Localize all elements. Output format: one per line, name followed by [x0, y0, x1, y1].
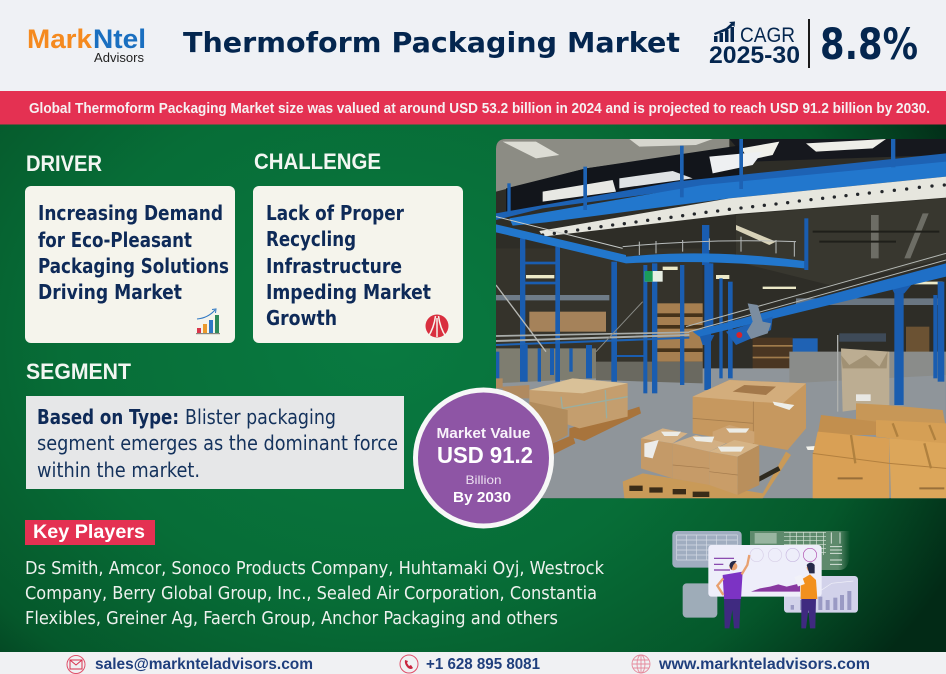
- logo: [27, 24, 146, 65]
- challenge text: Lack of Proper: [266, 201, 404, 225]
- key players list: Company, Berry Global Group, Inc., Sealed Air Corporation, Constantia: [25, 583, 597, 604]
- illustration: analysts at dashboard: [672, 531, 858, 628]
- key players list: Flexibles, Greiner Ag, Faerch Group, Anchor Packaging and others: [25, 608, 558, 629]
- panel: segment: segment emerges as the dominant force: [37, 431, 398, 455]
- footer: website: www.marknteladvisors.com: [658, 656, 870, 673]
- logo: Ntel: [93, 24, 146, 54]
- key players list: [25, 558, 605, 629]
- driver text: [38, 201, 229, 304]
- panel: segment: Blister packaging: [185, 405, 336, 429]
- person right: [794, 563, 817, 628]
- panel: driver: [25, 186, 235, 343]
- heading: driver: DRIVER: [26, 151, 102, 176]
- circle: market value: USD 91.2: [437, 442, 533, 468]
- heading: segment: SEGMENT: [26, 359, 132, 384]
- key players list: Ds Smith, Amcor, Sonoco Products Company, Huhtamaki Oyj, Westrock: [25, 558, 605, 579]
- CAGR block: [709, 19, 918, 70]
- logo: Mark: [27, 24, 93, 54]
- key players label: Key Players: [33, 522, 145, 543]
- circle: market value: Market Value: [436, 426, 530, 442]
- icon: growth bars: [714, 22, 735, 42]
- driver text: for Eco-Pleasant: [38, 228, 192, 252]
- challenge text: Growth: [266, 306, 337, 330]
- circle: market value: [413, 388, 554, 528]
- logo: Advisors: [94, 50, 144, 65]
- summary banner: [0, 91, 946, 124]
- footer: phone: +1 628 895 8081: [426, 656, 540, 673]
- key players label: [25, 520, 155, 545]
- driver text: Packaging Solutions: [38, 254, 229, 278]
- panel: challenge: [253, 186, 463, 343]
- challenge text: Recycling: [266, 227, 356, 251]
- panel: segment: within the market.: [37, 458, 200, 482]
- header band: [0, 0, 946, 92]
- circle: market value: Billion: [466, 473, 502, 487]
- challenge text: Impeding Market: [266, 280, 431, 304]
- person left: [717, 555, 749, 628]
- circle: market value: By 2030: [453, 490, 511, 506]
- panel: segment: Based on Type:: [37, 405, 179, 429]
- driver text: Driving Market: [38, 280, 182, 304]
- footer: email: sales@marknteladvisors.com: [95, 656, 313, 673]
- title: Thermoform Packaging Market: [183, 27, 680, 59]
- icon: red road circle: [426, 314, 448, 338]
- CAGR block: 2025-30: [709, 42, 800, 69]
- photo: warehouse conveyor with boxes: [496, 139, 946, 498]
- footer band: [0, 652, 946, 674]
- CAGR block: 8.8%: [820, 21, 918, 70]
- driver text: Increasing Demand: [38, 201, 223, 225]
- challenge text: [266, 201, 431, 330]
- green background: [0, 124, 946, 652]
- CAGR block: CAGR: [740, 24, 795, 47]
- challenge text: Infrastructure: [266, 254, 402, 278]
- icon: bar chart: [196, 309, 220, 334]
- heading: challenge: CHALLENGE: [254, 149, 381, 174]
- panel: segment: [26, 396, 404, 489]
